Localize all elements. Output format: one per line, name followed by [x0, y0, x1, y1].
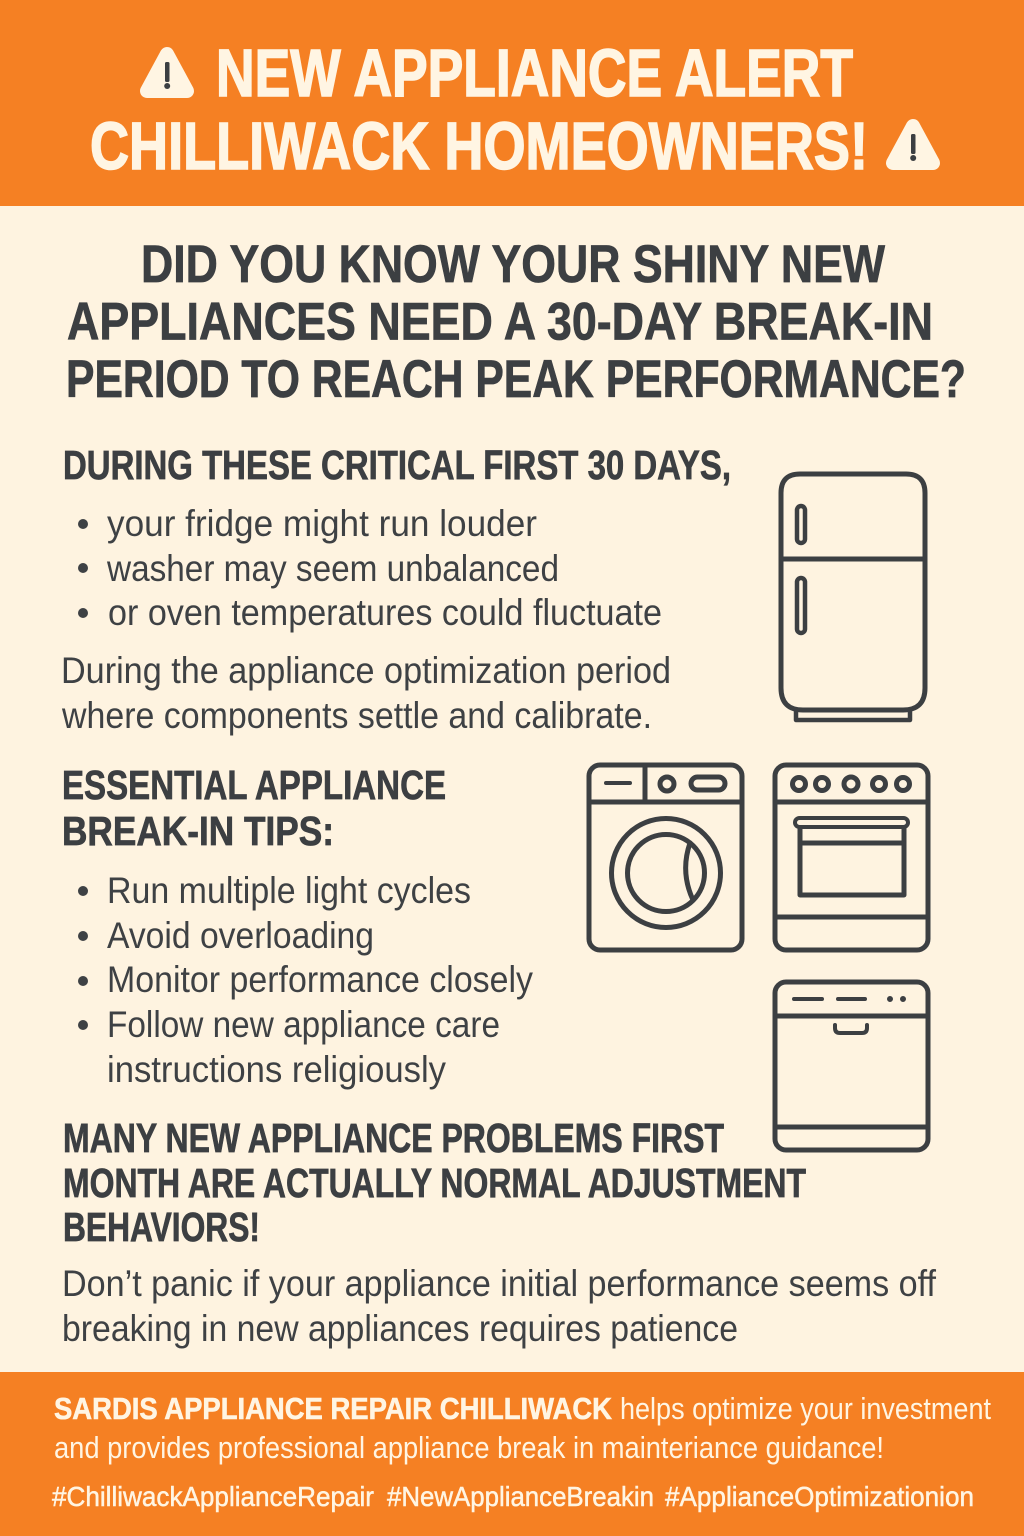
- icon: warning triangle left: [147, 54, 187, 91]
- hashtags: [52, 1481, 974, 1512]
- subheading: break-in tips: BREAK-IN TIPS:: [62, 808, 334, 854]
- footer company line: [54, 1391, 991, 1426]
- hashtags: #ChilliwackApplianceRepair: [52, 1481, 374, 1512]
- header banner: [0, 0, 1024, 206]
- callout: normal adjustment behaviors: MANY NEW APPLIANCE PROBLEMS FIRST: [63, 1115, 724, 1161]
- callout: normal adjustment behaviors: BEHAVIORS!: [63, 1204, 260, 1250]
- icon: washing machine: [589, 765, 742, 950]
- bullet list: tips: [78, 870, 533, 1090]
- paragraph: don't panic: [62, 1263, 937, 1349]
- bullet list: symptoms: washer may seem unbalanced: [106, 548, 559, 589]
- hashtags: #ApplianceOptimizationion: [665, 1481, 974, 1512]
- icon: oven: [775, 765, 928, 950]
- callout: normal adjustment behaviors: [63, 1115, 806, 1250]
- hashtags: #NewApplianceBreakin: [387, 1481, 654, 1512]
- title line 1: NEW APPLIANCE ALERT: [216, 36, 853, 111]
- footer banner: [0, 1372, 1024, 1536]
- paragraph: don't panic: breaking in new appliances requires patience: [62, 1308, 738, 1349]
- bullet list: tips: Follow new appliance care: [107, 1004, 500, 1045]
- bullet list: tips: Avoid overloading: [107, 915, 374, 956]
- icon: dishwasher: [775, 982, 928, 1150]
- paragraph: optimization period: [61, 650, 671, 736]
- bullet list: tips: Monitor performance closely: [107, 959, 533, 1000]
- subheading: break-in tips: ESSENTIAL APPLIANCE: [62, 762, 446, 808]
- bullet list: symptoms: [78, 503, 662, 633]
- footer company line: SARDIS APPLIANCE REPAIR CHILLIWACK: [54, 1391, 613, 1426]
- bullet list: tips: instructions religiously: [107, 1049, 446, 1090]
- bullet list: symptoms: or oven temperatures could fluctuate: [108, 592, 662, 633]
- callout: normal adjustment behaviors: MONTH ARE ACTUALLY NORMAL ADJUSTMENT: [63, 1160, 806, 1206]
- icon: refrigerator: [781, 474, 925, 720]
- paragraph: optimization period: where components settle and calibrate.: [61, 695, 652, 736]
- subheading: break-in tips: [62, 762, 446, 854]
- paragraph: optimization period: During the appliance optimization period: [61, 650, 671, 691]
- subheading: first 30 days: DURING THESE CRITICAL FIRST 30 DAYS,: [63, 442, 731, 488]
- main question heading: [66, 235, 966, 409]
- bullet list: symptoms: your fridge might run louder: [107, 503, 537, 544]
- paragraph: don't panic: Don’t panic if your appliance initial performance seems off: [62, 1263, 937, 1304]
- footer guidance line: and provides professional appliance break in mainteriance guidance!: [54, 1430, 884, 1465]
- bullet list: tips: Run multiple light cycles: [107, 870, 471, 911]
- icon: warning triangle right: [893, 126, 933, 163]
- main question heading: DID YOU KNOW YOUR SHINY NEW: [141, 235, 885, 294]
